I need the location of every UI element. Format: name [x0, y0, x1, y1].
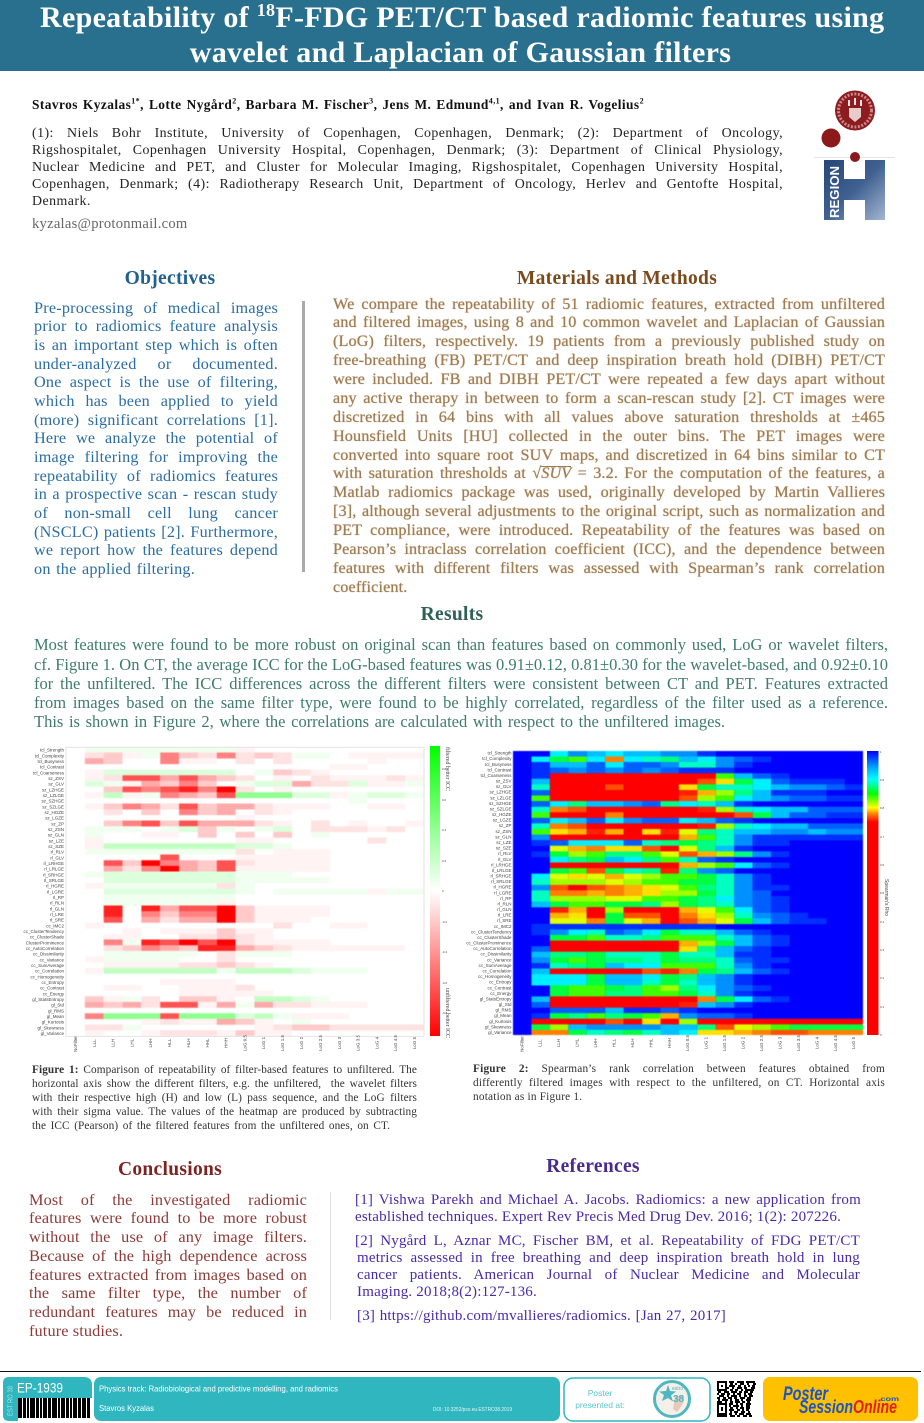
logos [814, 90, 895, 220]
heading: conclusions: Conclusions [118, 1159, 222, 1180]
colour bar: unfiltered better ICC [444, 988, 451, 1038]
chart labels and colour bar: rl_RLN [50, 901, 64, 906]
panel: conclusions text: Most of the investigated radiomic [29, 1190, 307, 1209]
QR code [717, 1381, 756, 1417]
colour bar: filtered better ICC [444, 747, 451, 791]
panel: references list: [2] Nygård L, Aznar MC, Fischer BM, et al. Repeatability of FDG PET/CT [355, 1232, 860, 1248]
caption: figure 2: notation as in Figure 1. [473, 1091, 582, 1103]
chart labels and colour bar: gl_Std [51, 1003, 64, 1008]
colour bar: 0 [880, 1033, 882, 1037]
chart labels and colour bar: HLL [612, 1038, 616, 1047]
colour bar: 0.2 [442, 859, 447, 863]
chart labels and colour bar: LoG 1 [261, 1036, 266, 1049]
chart labels and colour bar: tcl_Coarseness [480, 773, 512, 778]
caption: figure 1: with their respective high (H) and low (L) pass sequence, and the LoG filters [32, 1092, 417, 1104]
panel: materials and methods text: were included. FB and DIBH PET/CT were repeated a few days apart without [333, 370, 885, 388]
panel: objectives text: image filtering for improving the [34, 448, 278, 466]
panel: objectives text: we report how the features depend [34, 541, 278, 559]
chart labels and colour bar: gl_StatsEntropy [32, 997, 65, 1002]
figure 1: ICC difference heatmap [23, 746, 451, 1052]
colour bar: -0.4 [442, 950, 448, 954]
chart labels and colour bar: tcl_Coarseness [33, 770, 65, 775]
chart labels and colour bar: rl_LGRE [47, 889, 64, 894]
panel: materials and methods text: Pearson’s intraclass correlation coefficient (ICC), and the dependence between [333, 540, 885, 558]
chart labels and colour bar: LoG 4.5 [393, 1034, 398, 1051]
chart labels and colour bar: NoFilter [73, 1036, 78, 1052]
colour bar: 0.7 [880, 835, 885, 839]
chart labels and colour bar: tcl_Strength [487, 751, 512, 756]
chart labels and colour bar: rl_SRHGE [490, 874, 512, 878]
icon: ESTRO 38 logo [654, 1382, 690, 1416]
colour bar: 0.4 [880, 920, 885, 924]
panel: references list: [3] https://github.com/mvallieres/radiomics. [Jan 27, 2017] [357, 1308, 726, 1324]
affiliations: Copenhagen, Denmark; (4): Radiotherapy Research Unit, Department of Oncology, Herlev and Gentofte Hospital, [32, 176, 783, 192]
chart labels and colour bar: tcl_Contrast [487, 767, 512, 772]
chart labels and colour bar: cc_Energy [490, 991, 512, 996]
chart labels and colour bar: rl_RLN [497, 902, 512, 906]
chart labels and colour bar: HHH [667, 1038, 672, 1048]
chart labels and colour bar: sz_LZE [496, 840, 512, 845]
panel: objectives text: (NSCLC) patients [2]. Furthermore, [34, 523, 278, 541]
chart labels and colour bar: LoG 0.5 [242, 1034, 248, 1051]
PosterSessionOnline logo: .com [878, 1396, 899, 1403]
chart labels and colour bar: LoG 3 [778, 1036, 782, 1049]
colour bar [430, 746, 451, 1038]
chart labels and colour bar: cc_SumAverage [31, 963, 64, 968]
colour bar: 0.6 [880, 863, 885, 867]
chart labels and colour bar: rl_GLN [497, 907, 512, 912]
chart labels and colour bar [466, 750, 889, 1052]
panel: objectives text: under-analyzed or documented. [34, 355, 278, 373]
chart labels and colour bar: sz_ZSV [48, 776, 64, 781]
caption: figure 1: the ICC (Pearson) of the filtered features from the unfiltered ones, on CT. [32, 1120, 390, 1132]
panel: objectives text: of non-small cell lung cancer [34, 504, 278, 522]
heading: objectives: Objectives [125, 268, 215, 288]
chart labels and colour bar: cc_Contrast [487, 985, 512, 990]
panel: references list: [1] Vishwa Parekh and Michael A. Jacobs. Radiomics: a new application from [355, 1192, 861, 1208]
panel: objectives text: One aspect is the use of filtering, [34, 373, 278, 391]
caption: figure 1 [32, 1064, 417, 1132]
panel: objectives text: which has been applied to yield [34, 392, 278, 410]
chart labels and colour bar: sz_LZHGE [489, 790, 512, 795]
chart labels and colour bar: gl_Mean [47, 1014, 64, 1019]
chart labels and colour bar: gl_Kurtosis [489, 1019, 512, 1024]
chart labels and colour bar: sz_SZLGE [42, 804, 64, 809]
PosterSessionOnline logo: Poster [783, 1384, 829, 1405]
heatmap: filtered minus unfiltered ICC [84, 748, 424, 1036]
panel: objectives text: prior to radiomics feature analysis [34, 317, 278, 335]
chart labels and colour bar: gl_Std [499, 1002, 512, 1007]
chart labels and colour bar: rl_RP [53, 895, 64, 900]
chart labels and colour bar: tcl_Complexity [35, 753, 65, 758]
chart labels and colour bar: tcl_Busyness [485, 762, 512, 767]
chart labels and colour bar: HLH [630, 1038, 635, 1048]
chart labels and colour bar: sz_SZLGE [490, 806, 512, 812]
panel: materials and methods text [332, 295, 886, 596]
chart labels and colour bar: rl_HGRE [493, 885, 512, 890]
chart labels and colour bar: sz_GLN [495, 834, 512, 839]
track info box: Physics track: Radiobiological and predictive modelling, and radiomics [99, 1384, 338, 1394]
chart labels and colour bar: gl_Kurtosis [42, 1020, 65, 1025]
track info box: DOI: 10.3252/pso.eu.ESTRO38.2019 [433, 1407, 512, 1413]
chart labels and colour bar: cc_Variance [487, 957, 512, 962]
chart labels and colour bar: LoG 2.5 [318, 1034, 323, 1051]
chart labels and colour bar: LoG 3.5 [356, 1034, 360, 1051]
panel: conclusions text: future studies. [29, 1321, 123, 1340]
chart labels and colour bar: rl_RP [500, 896, 512, 901]
track info box [94, 1377, 560, 1421]
panel: objectives text: Here we analyze the potential of [34, 429, 278, 447]
chart labels and colour bar: sz_LZE [49, 838, 64, 843]
poster presented at box: Poster [588, 1388, 612, 1398]
chart labels and colour bar: sz_ZSN [48, 827, 64, 832]
chart labels and colour bar: rl_SRE [497, 918, 512, 923]
chart labels and colour bar: gl_StatsEntropy [480, 996, 512, 1001]
colour bar: 0.6 [442, 798, 447, 802]
icon: red dot [822, 128, 840, 148]
chart labels and colour bar: HHH [224, 1038, 228, 1048]
chart labels and colour bar: LLH [110, 1039, 116, 1047]
affiliations [32, 126, 783, 208]
chart labels and colour bar: LoG 3.5 [796, 1034, 801, 1051]
panel: results text [34, 635, 888, 731]
chart labels and colour bar: HHL [205, 1038, 210, 1048]
colour bar: 0.5 [880, 891, 885, 895]
chart labels and colour bar: gl_Skewness [37, 1025, 65, 1030]
colour bar: -0.8 [442, 1011, 448, 1015]
chart labels and colour bar: cc_ClusterTendency [471, 929, 512, 934]
poster id badge with barcode: EP-1939 [17, 1380, 63, 1396]
panel: references list [355, 1192, 861, 1324]
panel: materials and methods text: and filtered images, using 8 and 10 common wavelet and Laplacian of Gaussian [333, 313, 885, 331]
chart labels and colour bar: rl_LRE [50, 912, 64, 917]
chart labels and colour bar: LHH [148, 1038, 153, 1048]
panel: objectives text [34, 299, 278, 578]
chart labels and colour bar: rl_GLN [50, 906, 64, 911]
panel: conclusions text [29, 1190, 307, 1340]
chart labels and colour bar: LoG 1.5 [722, 1034, 727, 1051]
chart labels and colour bar: rl_LGRE [494, 890, 512, 895]
chart labels and colour bar: gl_Mean [494, 1013, 512, 1018]
chart labels and colour bar: LoG 4 [374, 1036, 380, 1049]
colour bar: 0.8 [442, 767, 447, 771]
colour bar: -0.2 [442, 920, 448, 924]
panel: results text: from images based on the same filter type, were found to be highly correlated, regardless of the filter used as a reference. [34, 693, 888, 712]
panel: materials and methods text: SUV [541, 464, 571, 482]
caption: figure 1: horizontal axis show the different filters, e.g. the unfiltered, the wavelet filters [32, 1078, 417, 1090]
affiliations: Denmark. [32, 194, 91, 208]
panel: conclusions text: without the use of any image filters. [29, 1227, 307, 1246]
colour bar [867, 750, 889, 1037]
chart labels and colour bar: LoG 5 [851, 1036, 856, 1049]
panel: objectives text: Pre-processing of medical images [34, 299, 278, 317]
footer bar [3, 1377, 918, 1422]
chart labels and colour bar: gl_Skewness [485, 1024, 512, 1029]
chart labels and colour bar: LLH [556, 1039, 561, 1047]
chart labels and colour bar: sz_LZHGE [42, 787, 64, 792]
chart labels and colour bar: tcl_Busyness [37, 759, 65, 764]
panel: objectives text: in a prospective scan - rescan study [34, 485, 278, 503]
chart labels and colour bar: tcl_Contrast [40, 765, 65, 770]
chart labels and colour bar: LoG 4 [814, 1036, 820, 1049]
chart labels and colour bar: cc_Correlation [482, 968, 512, 974]
chart labels and colour bar: LHL [574, 1038, 580, 1047]
chart labels and colour bar: rl_GLV [50, 855, 64, 860]
chart labels and colour bar: sz_ZSV [496, 778, 512, 784]
panel: objectives text: on the applied filtering. [34, 560, 195, 578]
colour bar: 0.4 [442, 828, 447, 832]
icon: ESTRO 38 logo: estro [672, 1386, 683, 1392]
chart labels and colour bar: sz_SZHGE [41, 799, 64, 804]
chart labels and colour bar: LoG 2 [740, 1036, 746, 1049]
chart labels and colour bar: cc_Variance [40, 957, 64, 962]
chart labels and colour bar: rl_SRHGE [43, 872, 64, 877]
chart labels and colour bar: rl_LRHGE [491, 862, 512, 867]
colour bar: 0.2 [880, 976, 885, 980]
chart labels and colour bar: sz_SZHGE [489, 801, 512, 806]
chart labels and colour bar: cc_SumAverage [479, 963, 512, 968]
chart labels and colour bar: sz_LZLGE [43, 793, 64, 798]
chart labels and colour bar: cc_ClusterShade [30, 935, 64, 940]
panel: materials and methods text: coefficient. [333, 578, 407, 596]
chart labels and colour bar: cc_Contrast [40, 986, 65, 991]
chart labels and colour bar: LLL [92, 1039, 97, 1047]
chart labels and colour bar: sz_ZSN [495, 829, 512, 834]
chart labels and colour bar: sz_LZLGE [490, 795, 512, 800]
panel: results text: This is shown in Figure 2, where the correlations are calculated with respect to the unfiltered images. [34, 712, 725, 731]
panel: materials and methods text: (LoG) filters, respectively. 19 patients from a previously published study on [333, 332, 885, 350]
chart labels and colour bar: ClusterProminence [26, 940, 64, 945]
poster presented at box: presented at: [575, 1400, 625, 1410]
poster id badge with barcode [3, 1377, 92, 1421]
panel: objectives text: repeatability of radiomics features [34, 467, 278, 485]
chart labels and colour bar: sz_GLV [496, 784, 512, 789]
chart labels and colour bar: gl_Variance [41, 1031, 64, 1036]
heading: references: References [546, 1156, 640, 1177]
panel: materials and methods text: Hounsfield Units [HU] collected in the outer bins. The PET images were [333, 427, 885, 445]
email: kyzalas@protonmail.com [32, 216, 188, 232]
chart labels and colour bar: sz_ZP [499, 823, 512, 828]
PosterSessionOnline logo: Online [853, 1397, 897, 1417]
chart labels and colour bar: rl_LRHGE [43, 861, 64, 866]
panel: materials and methods text: Matlab radiomics package was used, originally developed by Martin Vallieres [333, 483, 885, 501]
chart labels and colour bar: cc_IMC2 [494, 924, 512, 929]
chart labels and colour bar: LoG 2.5 [759, 1034, 764, 1051]
chart labels and colour bar: cc_Entropy [41, 980, 65, 985]
chart labels and colour bar: LLL [538, 1039, 542, 1047]
footer rule [0, 1371, 921, 1372]
colour bar: 0 [442, 889, 444, 893]
panel: results text: Most features were found to be more robust on original scan than features based on commonly used, LoG or wavelet filters, [34, 635, 888, 654]
caption: figure 2 [473, 1063, 885, 1103]
caption: figure 1: Figure 1: Comparison of repeatability of filter-based features to unfiltered. The [32, 1064, 417, 1076]
chart labels and colour bar: LoG 1 [704, 1036, 708, 1049]
chart labels and colour bar: rl_SRLGE [44, 878, 64, 883]
affiliations: (1): Niels Bohr Institute, University of Copenhagen, Copenhagen, Denmark; (2): Department of Oncology, [32, 126, 783, 140]
affiliations: Rigshospitalet, Copenhagen University Hospital, Copenhagen, Denmark; (3): Department of Clinical Physiology, [32, 142, 783, 158]
colour bar: 1 [880, 750, 882, 754]
chart labels and colour bar: cc_AutoCorrelation [473, 946, 512, 951]
chart labels and colour bar: cc_Correlation [35, 969, 64, 974]
caption: figure 2: differently filtered images with respect to the unfiltered, on CT. Horizontal axis [473, 1077, 885, 1089]
chart labels and colour bar: sz_LGZE [493, 818, 512, 823]
panel: references list: cancer patients. American Journal of Nuclear Medicine and Molecular [357, 1267, 860, 1283]
panel: materials and methods text: [3], although several adjustments to the original script, such as normalization and [333, 502, 885, 520]
chart labels and colour bar: HHL [648, 1038, 654, 1048]
caption: figure 1: with their sigma value. The values of the heatmap are produced by subtracting [32, 1106, 417, 1118]
affiliations: Nuclear Medicine and PET, and Cluster for Molecular Imaging, Rigshospitalet, Copenhagen University Hospital, [32, 160, 783, 174]
chart labels and colour bar: LoG 4.5 [833, 1034, 838, 1051]
PosterSessionOnline logo: Session [799, 1397, 853, 1417]
chart labels and colour bar: LHH [593, 1038, 598, 1048]
title banner [0, 0, 924, 71]
chart labels and colour bar: cc_ClusterProminence [466, 941, 512, 946]
chart labels and colour bar: tcl_Complexity [482, 756, 512, 761]
caption: figure 2: Figure 2: Spearman’s rank correlation between features obtained from [473, 1063, 885, 1075]
panel: materials and methods text: We compare the repeatability of 51 radiomic features, extracted from unfiltered [333, 295, 885, 313]
chart labels and colour bar: sz_SZE [496, 846, 512, 851]
colour bar: 0.1 [880, 1005, 885, 1009]
panel: materials and methods text: converted into square root SUV maps, and discretized in 64 bins similar to CT [333, 446, 885, 464]
panel: conclusions text: redundant features may be reduced in [29, 1302, 307, 1321]
poster presented at box [564, 1378, 710, 1421]
chart labels and colour bar: LoG 1.5 [280, 1034, 285, 1051]
panel: results text: for the unfiltered. The ICC differences across the different filters were consistent between CT and PET. Features extracted [34, 674, 888, 693]
chart labels and colour bar: HLH [186, 1038, 191, 1048]
chart labels and colour bar: sz_HGZE [44, 810, 64, 815]
panel: references list: metrics assessed in free breathing and deep inspiration breath hold in lung [357, 1250, 860, 1266]
chart labels and colour bar: LoG 2 [299, 1036, 304, 1049]
heatmap: Spearman rho [512, 750, 864, 1036]
chart labels and colour bar: rl_LRE [498, 913, 512, 918]
panel: conclusions text: the same filter type, the number of [29, 1283, 307, 1302]
chart labels and colour bar: gl_RMS [48, 1008, 64, 1013]
figure 2: Spearman correlation heatmap [466, 750, 889, 1052]
chart labels and colour bar: sz_HGZE [492, 812, 512, 817]
chart labels and colour bar: sz_LGZE [45, 816, 64, 821]
panel: materials and methods text: any active therapy in between to form a scan-rescan study [2]. CT images were [333, 389, 885, 407]
chart labels and colour bar: rl_LRLGE [44, 867, 64, 872]
chart labels and colour bar: cc_Dissimilarity [480, 952, 512, 957]
icon: ESTRO 38 logo: 38 [673, 1394, 685, 1405]
chart labels and colour bar: cc_Entropy [489, 980, 512, 985]
chart labels and colour bar: tcl_Strength [40, 748, 64, 753]
chart labels and colour bar: cc_Homogeneity [478, 974, 512, 979]
chart labels and colour bar: rl_SRLGE [491, 879, 512, 884]
chart labels and colour bar: cc_ClusterTendency [23, 929, 65, 934]
chart labels and colour bar: cc_ClusterShade [477, 935, 512, 940]
chart labels and colour bar: rl_SRE [50, 918, 64, 923]
colour bar: Spearman's Rho [883, 879, 889, 916]
chart labels and colour bar: LoG 5 [412, 1036, 417, 1049]
colour bar: 0.8 [880, 806, 885, 810]
track info box: Stavros Kyzalas [99, 1403, 154, 1413]
heading: materials and methods: Materials and Methods [517, 268, 717, 288]
chart labels and colour bar: NoFilter [520, 1036, 524, 1052]
chart labels and colour bar: cc_Dissimilarity [33, 952, 65, 957]
chart labels and colour bar: sz_ZP [51, 821, 64, 826]
poster id badge with barcode: EST RO 38 [8, 1386, 14, 1416]
chart labels and colour bar: HLL [167, 1038, 172, 1047]
panel: materials and methods text: PET compliance, were introduced. Repeatability of the features was based on [333, 521, 885, 539]
PosterSessionOnline logo [763, 1377, 918, 1421]
colour bar: -0.6 [442, 981, 448, 985]
chart labels and colour bar: cc_AutoCorrelation [26, 946, 64, 951]
chart labels and colour bar: rl_LRLGE [492, 868, 512, 873]
chart labels and colour bar: gl_Variance [488, 1030, 512, 1035]
panel: materials and methods text: with saturation thresholds at √ = 3.2. For the computation of the features, a [333, 464, 885, 482]
panel: conclusions text: features extracted from images based on [29, 1264, 307, 1284]
panel: references list: Imaging. 2018;8(2):127-136. [357, 1284, 537, 1300]
authors: Stavros Kyzalas1*, Lotte Nygård2, Barbara M. Fischer3, Jens M. Edmund4,1, and Ivan R. Vogelius2 [32, 97, 644, 112]
chart labels and colour bar: rl_RLV [51, 850, 64, 855]
chart labels and colour bar: sz_GLN [48, 833, 64, 838]
title banner: wavelet and Laplacian of Gaussian filters [190, 36, 731, 69]
title banner: Repeatability of 18F-FDG PET/CT based radiomic features using [40, 0, 884, 34]
chart labels and colour bar: cc_Energy [43, 991, 65, 996]
icon: region H logo: REGION [828, 166, 842, 218]
chart labels and colour bar: cc_IMC2 [46, 923, 64, 928]
panel: conclusions text: features were found to be more robust [29, 1208, 307, 1227]
icon: university seal [835, 90, 875, 130]
panel: objectives text: (more) significant correlations [1]. [34, 411, 278, 429]
panel: materials and methods text: features with different filters was assessed with Spearman’s rank correlation [333, 559, 885, 577]
chart labels and colour bar: LHL [130, 1038, 134, 1047]
panel: references list: established techniques. Expert Rev Precis Med Drug Dev. 2016; 1(2): 207226. [355, 1209, 841, 1225]
colour bar: 0.9 [880, 778, 885, 782]
chart labels and colour bar: sz_SZE [48, 844, 64, 849]
chart labels and colour bar: LoG 0.5 [685, 1034, 690, 1051]
chart labels and colour bar: gl_RMS [495, 1008, 512, 1013]
chart labels and colour bar: rl_RLV [498, 851, 512, 856]
chart labels and colour bar: sz_GLV [48, 782, 64, 787]
colour bar: 0.3 [880, 948, 885, 952]
chart labels and colour bar: rl_GLV [498, 857, 512, 862]
panel: materials and methods text: free-breathing (FB) PET/CT and deep inspiration breath hold (DIBH) PET/CT [333, 351, 885, 369]
chart labels and colour bar: LoG 3 [337, 1036, 342, 1049]
panel: materials and methods text: discretized in 64 bins with all values above saturation thresholds at ±465 [333, 408, 885, 426]
heading: results: Results [421, 604, 483, 625]
chart labels and colour bar: rl_HGRE [46, 884, 64, 889]
chart labels and colour bar: cc_Homogeneity [30, 974, 65, 979]
panel: objectives text: is an important step which is often [34, 336, 278, 354]
chart labels and colour bar [23, 746, 451, 1052]
panel: results text: cf. Figure 1. On CT, the average ICC for the LoG-based features was 0.91±0.12, 0.81±0.30 for the wavelet-based, and 0.92±0.10 [34, 655, 888, 674]
panel: conclusions text: Because of the high dependence across [29, 1246, 307, 1265]
